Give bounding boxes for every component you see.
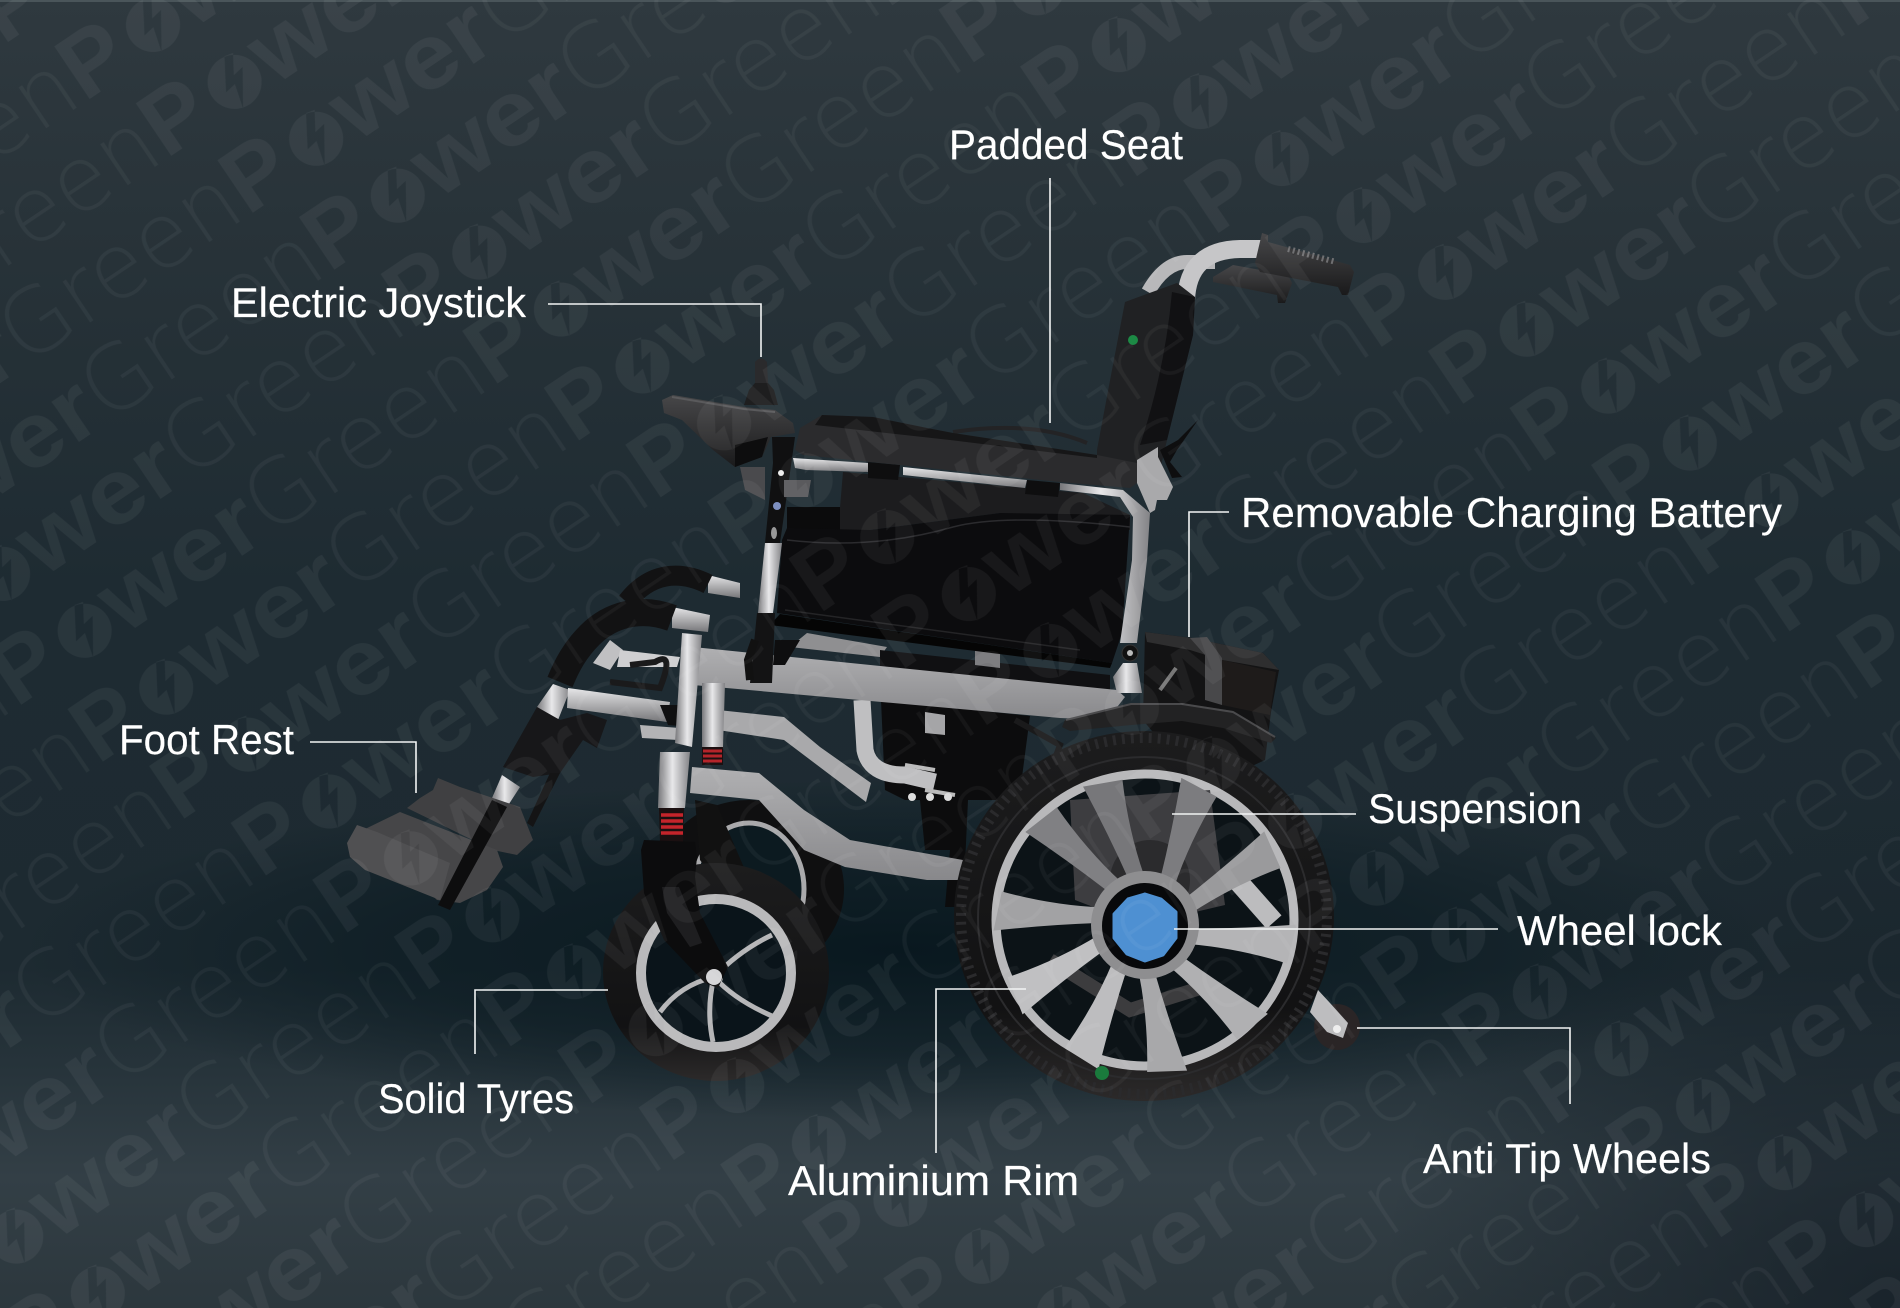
callout: electric joystick: Electric Joystick	[231, 279, 527, 326]
backrest	[1097, 283, 1198, 478]
callout: electric joystick	[231, 279, 761, 357]
callout: suspension: Suspension	[1368, 785, 1582, 832]
battery pack	[1143, 632, 1279, 790]
armrest column	[748, 437, 800, 683]
large rear wheel	[954, 731, 1334, 1101]
callout: solid tyres	[378, 990, 608, 1122]
leg rest pads and tubes	[492, 575, 740, 827]
callout: foot rest	[119, 716, 416, 793]
callout: removable charging battery	[1189, 489, 1782, 637]
front fork	[641, 840, 728, 988]
wheelchair illustration	[347, 233, 1360, 1101]
push handles	[1148, 233, 1354, 303]
callout: wheel lock: Wheel lock	[1517, 907, 1723, 954]
callout: padded seat: Padded Seat	[949, 121, 1183, 168]
callout: aluminium rim: Aluminium Rim	[788, 1157, 1079, 1204]
central mechanism	[862, 700, 1060, 907]
foot rest	[347, 778, 533, 910]
anti tip wheel	[1310, 990, 1360, 1050]
wheel lock knob	[1114, 894, 1176, 961]
seat frame tube	[793, 447, 1173, 693]
rim spokes	[994, 778, 1297, 1072]
tyre sticker	[1095, 1066, 1109, 1080]
motor and inner parts	[1050, 790, 1274, 1010]
callout: removable charging battery: Removable Charging Battery	[1241, 489, 1782, 536]
callout: aluminium rim	[788, 989, 1079, 1204]
hub	[1091, 871, 1199, 979]
upper cross bars	[693, 633, 1125, 720]
wheel fender	[1062, 703, 1276, 743]
callout: solid tyres: Solid Tyres	[378, 1075, 574, 1122]
callout: anti tip wheels	[1357, 1028, 1711, 1182]
rear caster wheel	[654, 800, 844, 978]
lower frame tubes	[690, 710, 963, 880]
small front wheel	[603, 863, 829, 1081]
seat side panel	[770, 472, 1130, 668]
front post and shock absorbers	[658, 633, 725, 842]
callout: anti tip wheels: Anti Tip Wheels	[1423, 1135, 1711, 1182]
padded seat cushion	[795, 415, 1137, 488]
callout: foot rest: Foot Rest	[119, 716, 294, 763]
electric joystick controller	[662, 358, 811, 500]
